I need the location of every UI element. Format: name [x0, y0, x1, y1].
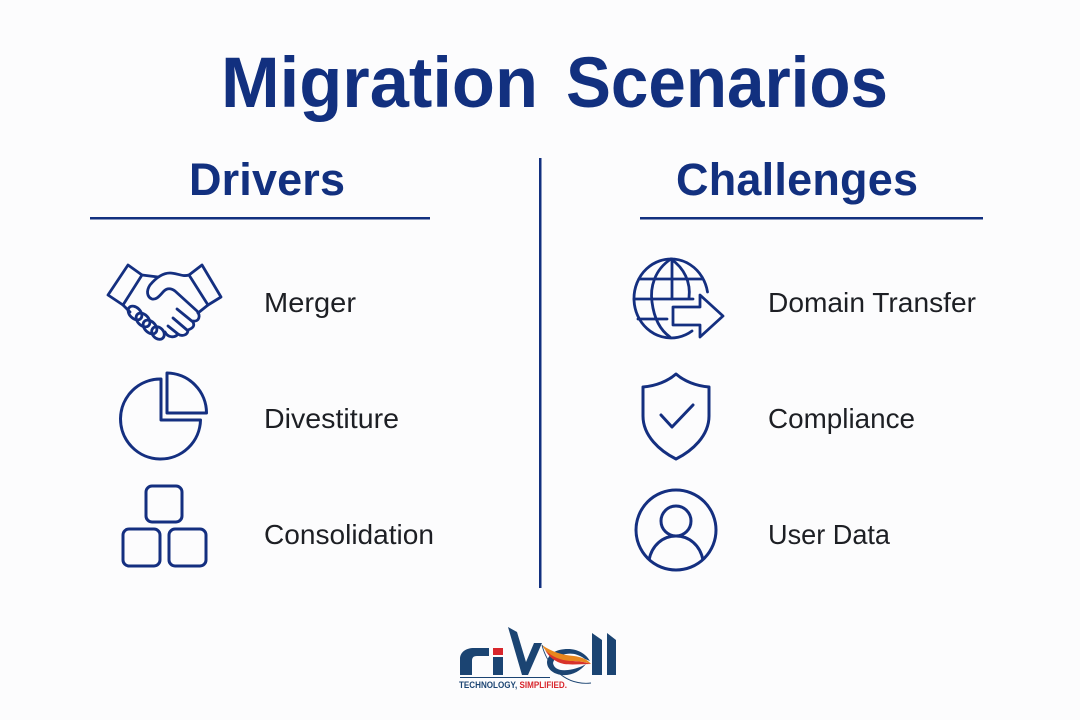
label: consolidation: Consolidation	[264, 519, 434, 550]
title: Scenarios	[566, 44, 888, 123]
icon: shield with check	[643, 374, 709, 459]
center divider	[539, 158, 542, 588]
panel: drivers	[90, 154, 434, 566]
icon: handshake	[108, 265, 221, 342]
logo i	[493, 648, 503, 675]
label: domain transfer: Domain Transfer	[768, 287, 976, 318]
panel: challenges	[634, 154, 983, 570]
title: Migration	[221, 44, 538, 123]
label: merger: Merger	[264, 287, 356, 318]
icon: pie chart	[121, 373, 207, 459]
icon: user in circle	[636, 490, 716, 570]
logo v	[508, 627, 542, 675]
logo r	[460, 648, 489, 675]
label: divestiture: Divestiture	[264, 403, 399, 434]
heading: drivers: Drivers	[189, 154, 345, 205]
logo l letters	[592, 633, 616, 675]
label: compliance: Compliance	[768, 403, 915, 434]
heading: challenges: Challenges	[676, 154, 918, 205]
logo tagline: TECHNOLOGY, SIMPLIFIED.	[459, 680, 567, 690]
icon: blocks	[123, 486, 206, 566]
icon: globe with arrow	[634, 259, 723, 338]
logo e swoosh	[542, 645, 591, 683]
label: user data: User Data	[768, 519, 890, 550]
logo: rivell	[459, 627, 616, 690]
